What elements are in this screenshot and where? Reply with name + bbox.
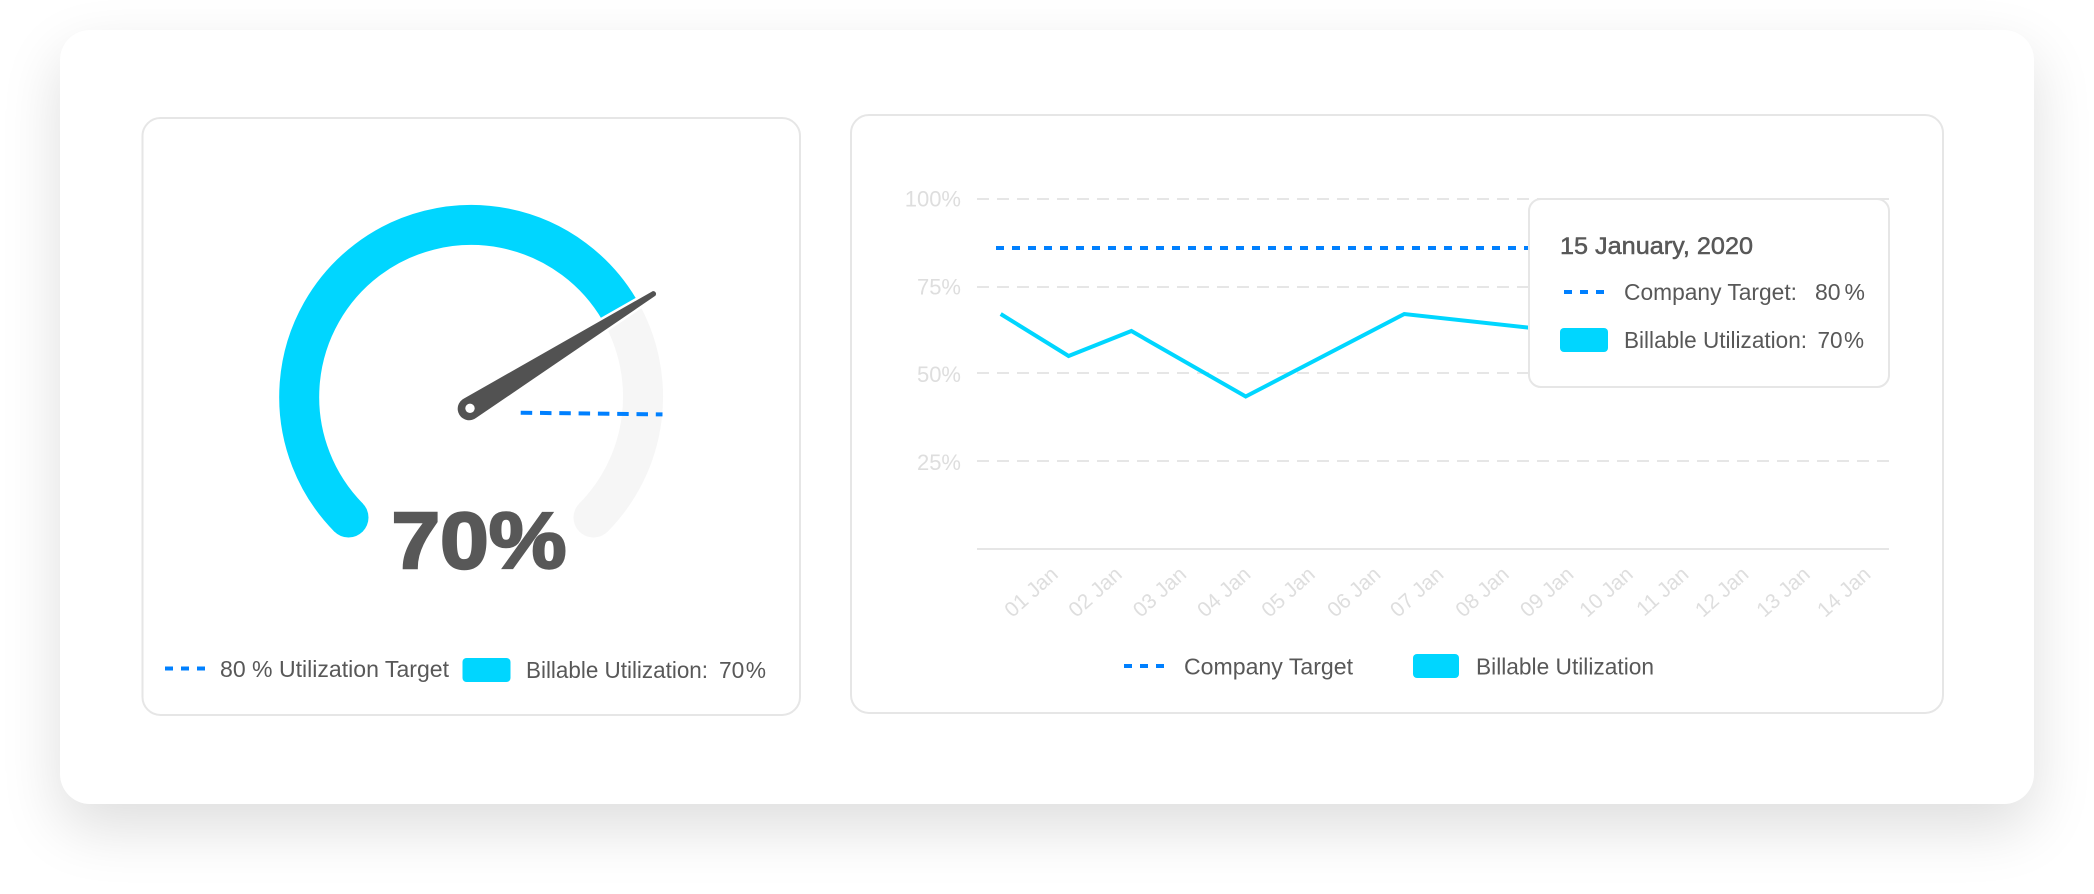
gauge needle (458, 291, 656, 420)
x axis labels: 05 Jan (1257, 563, 1320, 622)
y axis labels: 25% (917, 450, 961, 475)
tooltip row: company target: Company Target: (1624, 279, 1797, 305)
tooltip date: 15 January, 2020 (1560, 233, 1753, 260)
y axis labels: 100% (905, 186, 961, 212)
panel: line chart (851, 115, 1943, 713)
tooltip row: company target: 80 % (1815, 279, 1865, 305)
x axis labels: 01 Jan (1000, 563, 1063, 622)
tooltip row: billable utilization (1560, 327, 1864, 353)
x axis labels: 10 Jan (1575, 563, 1638, 622)
x axis labels: 03 Jan (1129, 563, 1191, 622)
tooltip (1529, 199, 1889, 387)
gauge track (574, 311, 643, 538)
gauge value: 70% (392, 496, 566, 585)
x axis labels: 07 Jan (1386, 563, 1448, 622)
tooltip row: billable utilization: 70 % (1818, 327, 1864, 353)
tooltip row: company target (1564, 279, 1865, 305)
x axis labels: 09 Jan (1516, 563, 1578, 622)
x axis labels: 02 Jan (1064, 563, 1127, 622)
grid lines (977, 199, 1889, 461)
y axis labels: 50% (917, 362, 961, 387)
tooltip row: billable utilization: Billable Utilization: (1624, 327, 1807, 353)
x axis line (977, 548, 1889, 550)
target dashed line (521, 413, 662, 414)
legend: billable utilization (462, 657, 766, 683)
x axis labels: 14 Jan (1813, 563, 1875, 622)
x axis labels: 08 Jan (1451, 563, 1514, 622)
x axis labels: 11 Jan (1632, 563, 1693, 621)
x axis labels: 04 Jan (1193, 563, 1255, 622)
legend: utilization target: 80 % Utilization Target (220, 656, 450, 682)
legend: billable utilization: Billable Utilization (1476, 654, 1654, 680)
legend: billable utilization: 70 % (719, 657, 766, 683)
gauge value arc (299, 225, 620, 538)
panel: gauge (142, 118, 800, 715)
x axis labels: 06 Jan (1323, 563, 1385, 622)
x axis labels: 12 Jan (1691, 563, 1753, 622)
x axis labels: 13 Jan (1752, 563, 1815, 622)
legend: company target: Company Target (1184, 654, 1354, 680)
legend: billable utilization: Billable Utilization: (526, 657, 708, 683)
y axis labels (905, 186, 961, 475)
company target dashed line (996, 246, 1530, 250)
y axis labels: 75% (917, 274, 961, 300)
x axis labels (1000, 563, 1875, 622)
billable utilization line (1001, 314, 1532, 396)
